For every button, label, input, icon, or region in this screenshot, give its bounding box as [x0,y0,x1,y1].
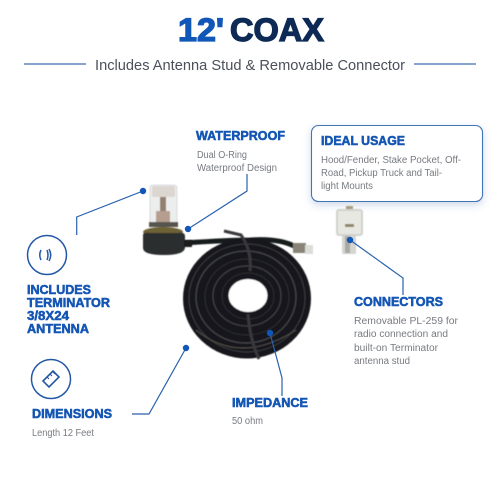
callout: dimensions: Length 12 Feet [32,428,94,439]
subtitle: Includes Antenna Stud & Removable Connector [95,58,405,74]
callout: connectors: antenna stud [354,356,410,367]
callout: waterproof: Dual O-Ring [197,150,247,161]
callout: includes terminator antenna: TERMINATOR [27,296,110,310]
panel: ideal usage: Hood/Fender, Stake Pocket, Off- [321,155,461,166]
callout: dimensions: DIMENSIONS [32,407,112,421]
callout: dimensions [32,345,189,439]
panel: ideal usage: Road, Pickup Truck and Tail- [321,168,442,179]
callout: connectors: Removable PL-259 for [354,316,459,327]
title [178,12,325,48]
callout: includes terminator antenna: ANTENNA [27,322,89,336]
panel: ideal usage [312,126,482,202]
callout: impedance: 50 ohm [232,416,263,427]
callout: connectors: built-on Terminator [354,343,439,354]
callout: impedance: IMPEDANCE [232,396,308,410]
callout: includes terminator antenna: INCLUDES [27,283,91,297]
title: 12' [178,12,224,48]
product: coax cable coil [183,231,313,359]
callout: impedance [232,330,308,427]
callout: includes terminator antenna [27,188,146,336]
callout: connectors: CONNECTORS [354,295,443,309]
product: PL-259 connector [336,206,363,254]
callout: waterproof: Waterproof Design [197,163,277,174]
callout: connectors: radio connection and [354,329,448,340]
panel: ideal usage: IDEAL USAGE [321,134,405,148]
title: COAX [230,12,325,48]
callout: waterproof: WATERPROOF [196,129,285,143]
panel: ideal usage: light Mounts [321,181,373,192]
product: antenna stud mount [143,185,192,255]
icon: ruler [32,360,70,398]
callout: connectors [347,237,459,367]
cable tie [224,231,259,359]
icon: antenna signal [28,236,66,274]
cable end connector [293,243,313,254]
callout: includes terminator antenna: 3/8X24 [27,309,69,323]
callout: waterproof [185,129,285,232]
